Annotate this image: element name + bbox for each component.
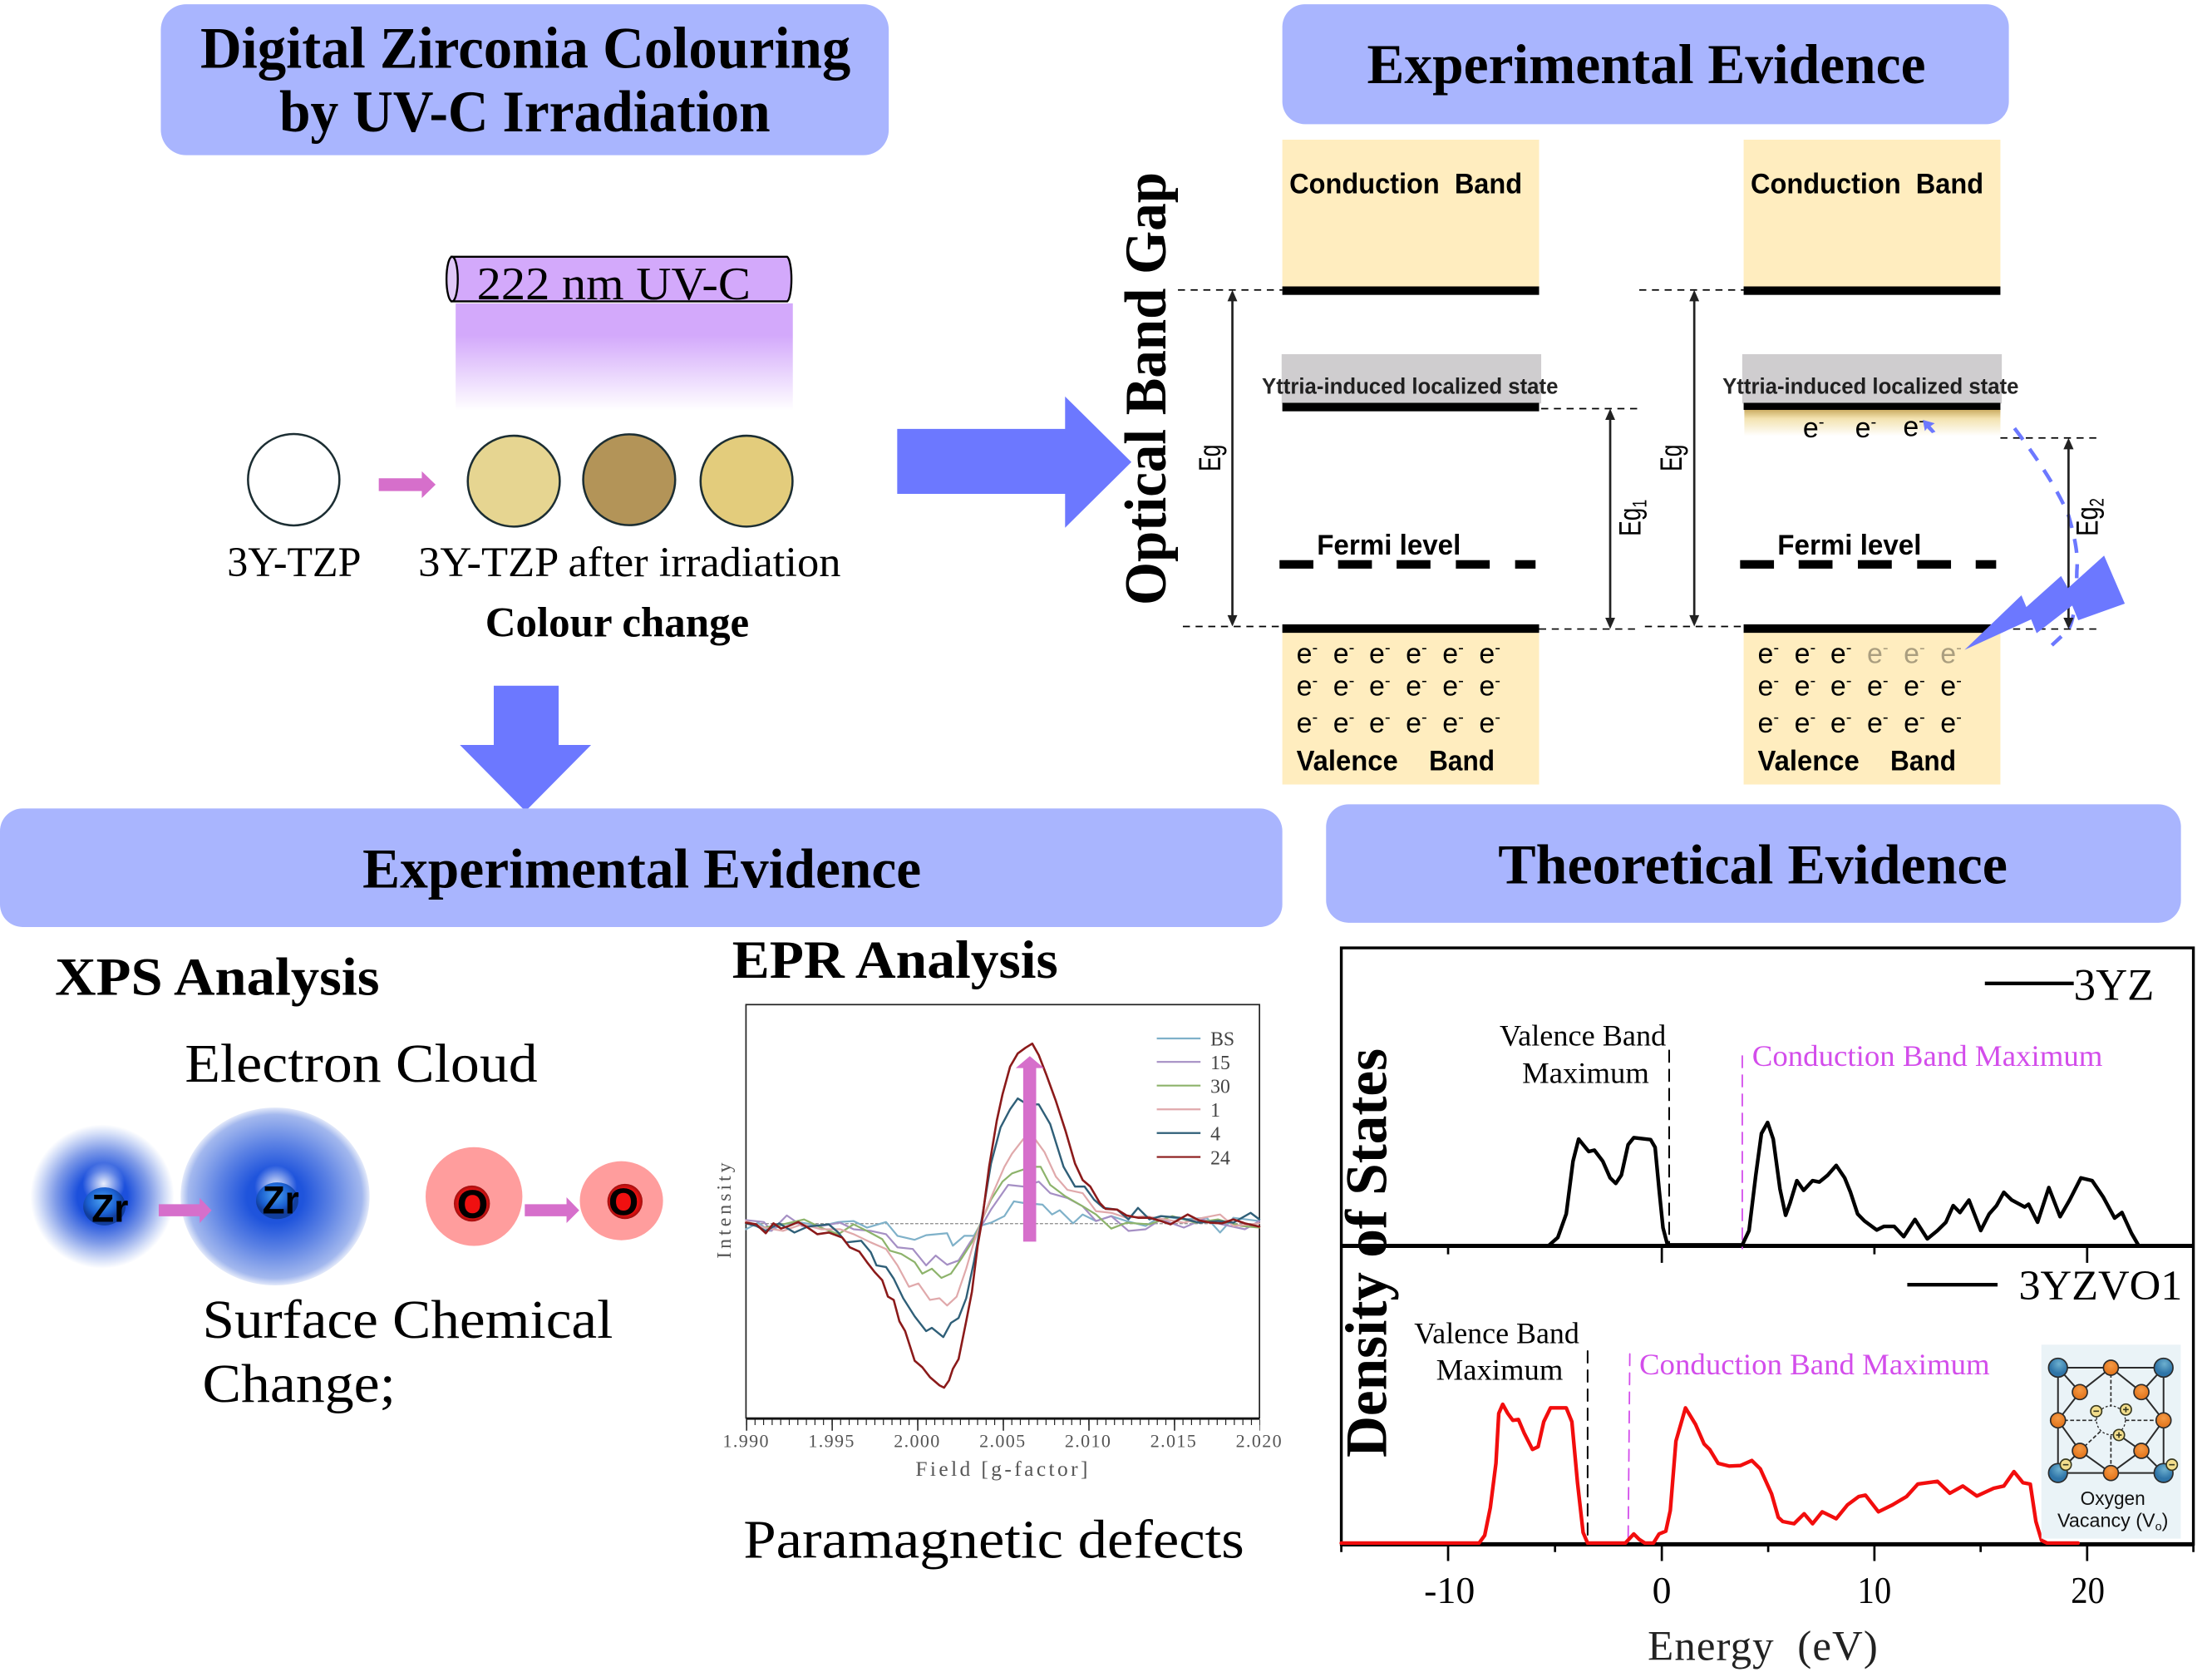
icon: Zr large cloud — [180, 1107, 370, 1285]
valence band: e — [1297, 671, 1312, 703]
fermi level — [1279, 530, 1535, 569]
label: electron cloud: Electron Cloud — [185, 1033, 538, 1094]
icon: O large — [426, 1147, 522, 1245]
label: valence band maximum top: Valence Band — [1500, 1019, 1666, 1053]
heading: EPR analysis: EPR Analysis — [732, 930, 1058, 989]
valence band: e — [1904, 639, 1919, 670]
valence band: - — [1956, 672, 1962, 690]
valence band: e — [1297, 639, 1312, 670]
inset: oxygen vacancy crystal: o — [2155, 1520, 2162, 1533]
x axis numbers: 2.005 — [979, 1430, 1026, 1451]
label: surface chemical change: Surface Chemical — [203, 1290, 613, 1350]
excitation arc dashed — [2014, 428, 2077, 645]
valence band: e — [1795, 671, 1810, 703]
valence band — [1283, 624, 1539, 785]
valence band: - — [1458, 708, 1464, 727]
label: optical band gap: Optical Band Gap — [1113, 172, 1179, 605]
y axis title: density of states: Density of States — [1334, 1048, 1400, 1457]
label: valence band maximum bottom: Maximum — [1436, 1354, 1564, 1387]
heading: experimental evidence bottom — [0, 808, 1283, 927]
curve: 3YZVO1 — [1342, 1351, 2078, 1543]
valence band: - — [1495, 672, 1500, 690]
yttria localized state with trapped electrons: Yttria-induced localized state — [1722, 372, 2019, 398]
x axis numbers — [723, 1430, 1283, 1451]
label: surface chemical change — [203, 1290, 613, 1414]
inset: oxygen vacancy crystal: ) — [2162, 1510, 2168, 1531]
valence band: - — [1846, 708, 1852, 727]
x axis numbers: 1.990 — [723, 1430, 770, 1451]
valence band: e — [1479, 639, 1495, 670]
yttria localized state with trapped electrons: e — [1903, 411, 1919, 442]
legend: 24 — [1210, 1147, 1230, 1169]
valence band: - — [1883, 639, 1889, 658]
x axis numbers: 2.010 — [1065, 1430, 1111, 1451]
arrow: Eg2 — [2063, 438, 2074, 629]
chart: EPR spectra — [714, 1004, 1283, 1481]
valence band: - — [1919, 639, 1925, 658]
yttria localized state with trapped electrons: e — [1803, 412, 1819, 444]
valence band: Band — [1890, 746, 1956, 777]
valence band: e — [1442, 639, 1458, 670]
valence band: e — [1758, 671, 1773, 703]
valence band: Valence — [1758, 746, 1860, 777]
legend: 30 — [1210, 1077, 1230, 1098]
arrow: irradiation — [379, 471, 436, 498]
icon: O large: O — [457, 1183, 488, 1227]
valence band: - — [1810, 708, 1815, 727]
x axis numbers: 1.995 — [808, 1430, 855, 1451]
valence band: Band — [1429, 746, 1495, 777]
legend: 3YZVO1: 3YZVO1 — [2019, 1263, 2182, 1309]
valence band: e — [1297, 708, 1312, 739]
arrow: Eg — [1689, 290, 1699, 626]
valence band: e — [1406, 671, 1421, 703]
x axis numbers: 0 — [1653, 1569, 1672, 1611]
label: valence band maximum bottom — [1414, 1317, 1579, 1387]
valence band: - — [1349, 708, 1354, 727]
valence band: - — [1312, 639, 1318, 658]
valence band: e — [1830, 639, 1846, 670]
x axis numbers: 2.000 — [894, 1430, 941, 1451]
valence band: - — [1495, 639, 1500, 658]
valence band: e — [1479, 671, 1495, 703]
inset: oxygen vacancy crystal — [2042, 1344, 2180, 1539]
title: by UV-C Irradiation — [279, 79, 771, 145]
fermi level: Fermi level — [1777, 530, 1921, 561]
label: conduction band maximum top: Conduction Band Maximum — [1752, 1039, 2103, 1073]
yttria localized state with trapped electrons — [1722, 354, 2019, 444]
valence band: - — [1773, 639, 1779, 658]
valence band: e — [1442, 708, 1458, 739]
valence band: e — [1333, 671, 1349, 703]
band diagram: after irradiation — [1639, 140, 2125, 785]
valence band: e — [1867, 639, 1883, 670]
icon: Zr small cloud — [30, 1125, 175, 1269]
title: Digital Zirconia Colouring — [200, 15, 850, 81]
valence band: e — [1940, 708, 1956, 739]
label: surface chemical change: Change; — [203, 1354, 396, 1414]
chart: density of states — [1334, 948, 2195, 1670]
yttria localized state with trapped electrons: - — [1919, 412, 1924, 431]
valence band: - — [1919, 708, 1925, 727]
arrow: O change — [525, 1197, 579, 1223]
valence band: - — [1349, 639, 1354, 658]
arrow: to band gap — [897, 397, 1131, 528]
heading: theoretical evidence — [1326, 804, 2181, 923]
heading: experimental evidence bottom: Experimental Evidence — [362, 837, 921, 900]
x axis numbers: 10 — [1858, 1569, 1891, 1611]
legend: BS — [1210, 1029, 1234, 1051]
valence band — [1744, 624, 2000, 785]
valence band: - — [1883, 672, 1889, 690]
title — [160, 4, 889, 155]
yttria localized state with trapped electrons: - — [1871, 413, 1876, 432]
x axis numbers: -10 — [1424, 1569, 1475, 1611]
valence band: e — [1830, 708, 1846, 739]
valence band: e — [1795, 639, 1810, 670]
arrow: down to experimental evidence — [460, 686, 591, 811]
legend: 4 — [1210, 1124, 1220, 1146]
conduction band — [1283, 140, 1539, 295]
valence band: e — [1333, 708, 1349, 739]
label: Eg1: 1 — [1628, 500, 1651, 508]
valence band: - — [1919, 672, 1925, 690]
fermi level: Fermi level — [1317, 530, 1461, 561]
valence band: - — [1421, 672, 1427, 690]
valence band: - — [1385, 639, 1391, 658]
inset: oxygen vacancy crystal: Oxygen — [2081, 1487, 2145, 1509]
valence band: - — [1810, 639, 1815, 658]
legend: 15 — [1210, 1053, 1230, 1074]
label: Eg2: 2 — [2086, 498, 2108, 506]
spectra curves — [746, 1043, 1259, 1388]
arrow: Eg1 — [1605, 408, 1615, 629]
icon: O small — [579, 1162, 663, 1240]
valence band: e — [1830, 671, 1846, 703]
valence band: - — [1846, 639, 1852, 658]
label: Eg2: Eg — [2070, 498, 2105, 536]
valence band: e — [1795, 708, 1810, 739]
conduction band — [1744, 140, 2000, 295]
UV light beam — [456, 303, 793, 411]
valence band: - — [1312, 672, 1318, 690]
yttria localized state with trapped electrons: - — [1819, 413, 1825, 432]
valence band: e — [1333, 639, 1349, 670]
arrow: electron excitation — [1923, 420, 1935, 433]
valence band: e — [1940, 639, 1956, 670]
x axis numbers: 2.020 — [1236, 1430, 1283, 1451]
label: Eg1: Eg — [1613, 498, 1648, 536]
valence band: e — [1369, 639, 1385, 670]
valence band: e — [1867, 671, 1883, 703]
label: after irradiation: 3Y-TZP after irradiation — [418, 540, 840, 586]
valence band: - — [1385, 672, 1391, 690]
valence band: - — [1773, 672, 1779, 690]
legend: 3YZ: 3YZ — [2074, 959, 2154, 1009]
label: 3Y-TZP: 3Y-TZP — [227, 540, 361, 586]
panel: XPS analysis — [30, 947, 663, 1414]
valence band: e — [1904, 708, 1919, 739]
label: valence band maximum top — [1500, 1019, 1666, 1089]
valence band: - — [1846, 672, 1852, 690]
label: valence band maximum bottom: Valence Band — [1414, 1317, 1579, 1350]
heading: XPS analysis: XPS Analysis — [55, 947, 380, 1006]
inset: oxygen vacancy crystal: Vacancy (V — [2057, 1510, 2152, 1531]
valence band: - — [1810, 672, 1815, 690]
label: Eg: Eg — [1192, 445, 1227, 471]
valence band: - — [1956, 639, 1962, 658]
valence band: e — [1406, 708, 1421, 739]
valence band: e — [1369, 708, 1385, 739]
valence band: - — [1773, 708, 1779, 727]
valence band: e — [1479, 708, 1495, 739]
valence band: - — [1421, 708, 1427, 727]
arrow: Zr change — [159, 1198, 212, 1223]
yttria localized state — [1262, 354, 1558, 412]
valence band: - — [1956, 708, 1962, 727]
valence band: - — [1312, 708, 1318, 727]
icon: Zr small cloud: Zr — [91, 1187, 128, 1231]
icon: UV lightning bolt — [1964, 555, 2125, 650]
conduction band: Conduction Band — [1751, 168, 1983, 200]
heading: experimental evidence top: Experimental Evidence — [1367, 33, 1925, 96]
band diagram: before irradiation — [1178, 140, 1651, 785]
valence band: - — [1495, 708, 1500, 727]
yttria localized state: Yttria-induced localized state — [1262, 372, 1558, 398]
valence band: e — [1904, 671, 1919, 703]
valence band: e — [1369, 671, 1385, 703]
valence band: e — [1442, 671, 1458, 703]
yttria localized state with trapped electrons: e — [1855, 412, 1871, 444]
UV lamp with label: 222 nm UV-C — [477, 259, 751, 310]
valence band: e — [1758, 708, 1773, 739]
label: valence band maximum top: Maximum — [1522, 1056, 1649, 1089]
valence band: - — [1349, 672, 1354, 690]
icon: O small: O — [608, 1181, 638, 1223]
fermi level — [1740, 530, 1996, 569]
x axis numbers: 2.015 — [1150, 1430, 1197, 1451]
legend: 1 — [1210, 1100, 1220, 1122]
conduction band: Conduction Band — [1289, 168, 1522, 200]
valence band: e — [1758, 639, 1773, 670]
x axis numbers — [1424, 1569, 2105, 1611]
frame and axes — [1340, 948, 2195, 1561]
white 3Y-TZP disc — [248, 434, 339, 525]
icon: Zr large cloud: Zr — [263, 1178, 299, 1222]
label: conduction band maximum bottom: Conduction Band Maximum — [1639, 1348, 1990, 1381]
arrow: Eg — [1228, 290, 1237, 626]
valence band: - — [1458, 639, 1464, 658]
x axis numbers: 20 — [2071, 1569, 2105, 1611]
valence band: - — [1421, 639, 1427, 658]
x axis title: Field [g-factor] — [915, 1457, 1087, 1481]
valence band: - — [1883, 708, 1889, 727]
y axis title: Intensity — [714, 1162, 736, 1259]
curve: 3YZ — [1549, 1050, 2138, 1249]
arrow: intensity increase — [1016, 1056, 1044, 1241]
label: colour change: Colour change — [485, 599, 749, 646]
valence band: e — [1867, 708, 1883, 739]
valence band: Valence — [1297, 746, 1398, 777]
label: Eg: Eg — [1653, 445, 1688, 471]
heading: experimental evidence top — [1283, 4, 2009, 124]
valence band: - — [1385, 708, 1391, 727]
plot frame and ticks — [746, 1004, 1260, 1425]
valence band: e — [1406, 639, 1421, 670]
valence band: - — [1458, 672, 1464, 690]
panel: UV-C irradiation — [227, 257, 840, 646]
valence band: e — [1940, 671, 1956, 703]
irradiated discs — [468, 434, 792, 526]
legend — [1157, 1029, 1234, 1169]
label: paramagnetic defects: Paramagnetic defects — [743, 1510, 1244, 1571]
x axis title: Energy (eV) — [1648, 1624, 1878, 1670]
heading: theoretical evidence: Theoretical Evidence — [1498, 833, 2008, 895]
